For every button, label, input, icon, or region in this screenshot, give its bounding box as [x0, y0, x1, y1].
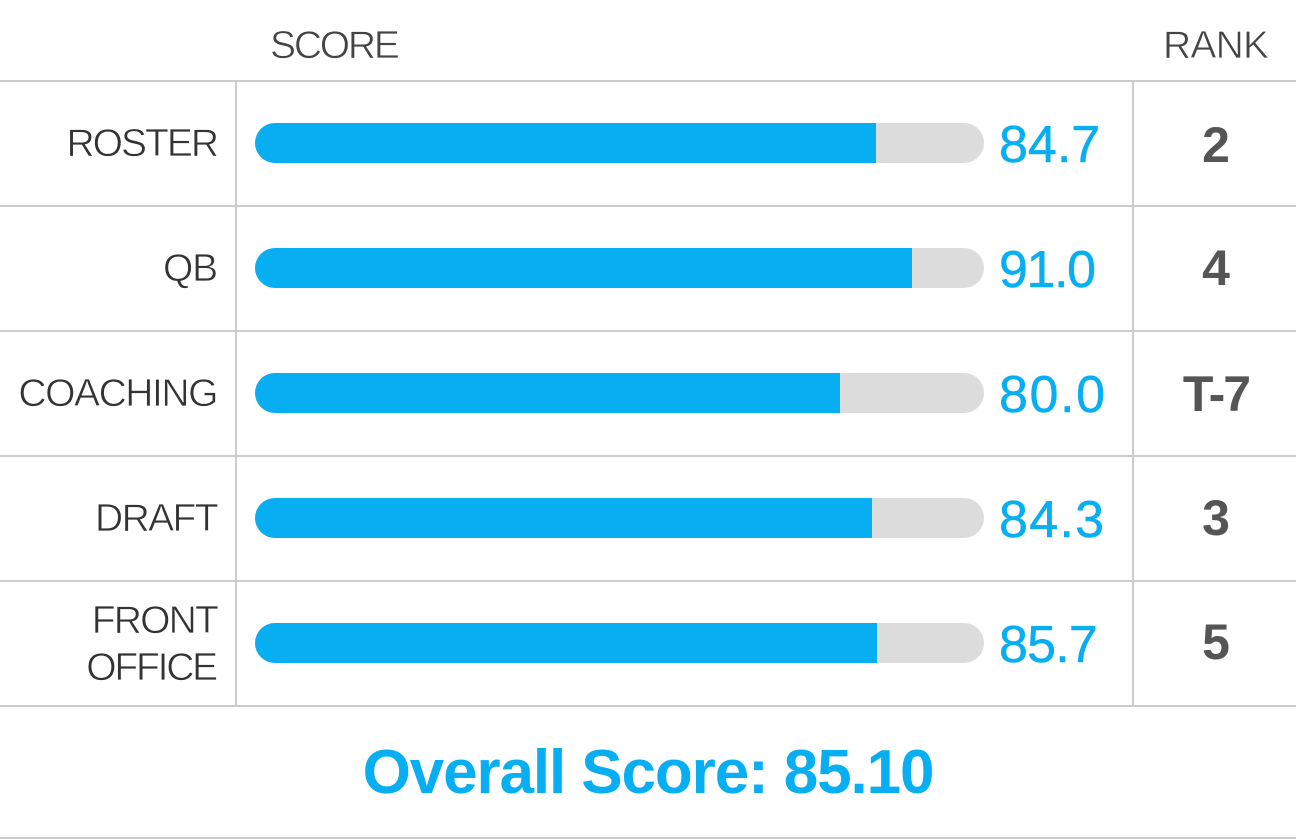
row label: roster: ROSTER — [66, 122, 217, 165]
value: draft score: 84.3 — [999, 491, 1105, 549]
rank: front office: 5 — [1202, 614, 1230, 670]
value: roster score: 84.7 — [999, 116, 1100, 174]
value: coaching score: 80.0 — [999, 366, 1107, 424]
value: QB score: 91.0 — [999, 241, 1095, 299]
bar: draft score — [255, 498, 984, 538]
heading: rank column: RANK — [1163, 24, 1268, 67]
row label: front office — [86, 599, 218, 689]
bar: front office score — [255, 623, 984, 663]
row label: draft: DRAFT — [95, 497, 217, 540]
bar: roster score — [255, 123, 984, 163]
bar: coaching score — [255, 373, 984, 413]
row label: coaching: COACHING — [18, 372, 217, 415]
row label: front office: OFFICE — [86, 646, 216, 689]
rank: draft: 3 — [1202, 490, 1230, 546]
row label: QB: QB — [163, 247, 217, 290]
heading: score column: SCORE — [270, 24, 398, 67]
rank: QB: 4 — [1202, 240, 1230, 296]
rank: coaching: T-7 — [1183, 366, 1249, 422]
row label: front office: FRONT — [92, 599, 217, 642]
value: front office score: 85.7 — [999, 616, 1097, 674]
bar: QB score — [255, 248, 984, 288]
rank: roster: 2 — [1202, 117, 1230, 173]
overall score: Overall Score: 85.10 — [363, 738, 933, 807]
